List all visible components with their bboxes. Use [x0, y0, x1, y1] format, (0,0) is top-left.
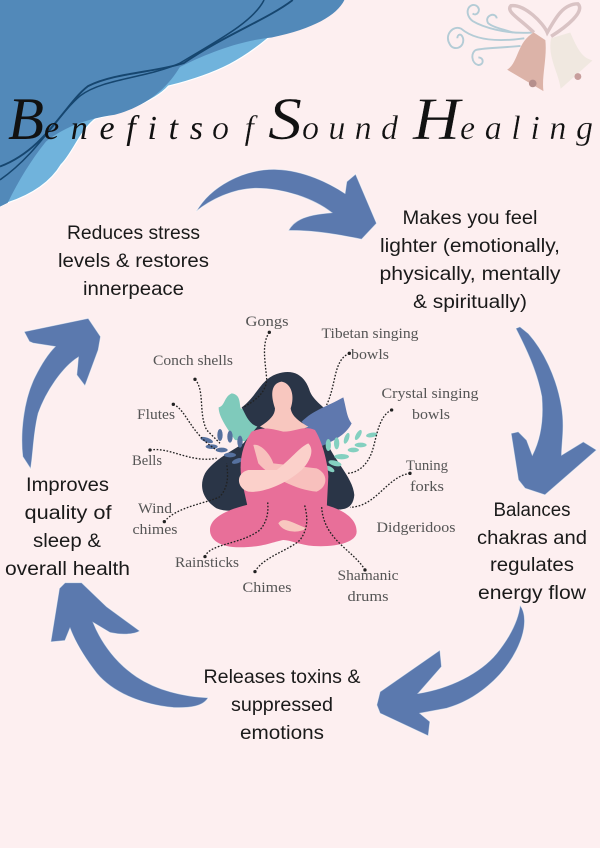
instrument labels: bowls — [351, 347, 389, 363]
arrow: top — [196, 169, 377, 239]
hair — [202, 372, 354, 511]
instrument labels: Crystal singing — [382, 386, 478, 402]
title: enefits — [44, 110, 203, 147]
instrument labels: bowls — [412, 407, 450, 423]
benefit text: chakras: energy flow — [478, 583, 586, 604]
folded foot — [278, 520, 307, 532]
benefit text: lighter — [380, 208, 561, 313]
benefit text: sleep — [5, 475, 130, 580]
instrument labels: forks — [410, 479, 444, 495]
title: B — [8, 86, 44, 152]
benefit text: lighter: physically, mentally — [380, 264, 561, 285]
arrow: left — [22, 318, 101, 469]
title: H — [412, 86, 464, 152]
benefit text: sleep: Improves — [26, 475, 109, 496]
arrow: bottom right — [377, 605, 525, 736]
benefit text: toxins: Releases toxins & — [204, 667, 361, 688]
instrument labels: chimes — [132, 522, 178, 538]
small leaves right — [317, 429, 378, 474]
benefit text: toxins: emotions — [240, 723, 324, 744]
benefit text: reduces stress: innerpeace — [83, 279, 184, 300]
benefit text: chakras: regulates — [490, 555, 574, 576]
title: ealing — [460, 110, 593, 147]
instrument labels: Bells — [132, 453, 162, 469]
benefit text: lighter: & spiritually) — [413, 292, 527, 313]
instrument labels: Tuning — [406, 458, 448, 474]
benefit text: chakras: Balances — [494, 500, 570, 521]
benefit text: chakras: chakras and — [477, 528, 587, 549]
benefit text: reduces stress: Reduces stress — [67, 223, 200, 244]
title: ound — [302, 110, 399, 147]
benefit text: chakras — [477, 500, 587, 604]
instrument labels: Wind — [138, 501, 173, 517]
crossed arms — [253, 445, 325, 492]
instrument labels: Chimes — [242, 580, 292, 596]
benefit text: toxins: suppressed — [231, 695, 333, 716]
benefit text: reduces stress: levels & restores — [58, 251, 209, 272]
benefit text: sleep: quality of — [24, 503, 112, 524]
instrument labels: Gongs — [246, 314, 289, 330]
benefit text: toxins — [204, 667, 361, 744]
small leaves left — [200, 429, 254, 470]
blue leaf — [302, 397, 352, 447]
title: S — [268, 86, 302, 152]
instrument labels: Shamanic — [338, 568, 398, 584]
teal leaf — [219, 393, 257, 442]
decorative blue blob top left — [0, 0, 344, 207]
instrument labels: Flutes — [137, 407, 175, 423]
instrument labels: Didgeridoos — [376, 520, 456, 536]
torso — [241, 428, 328, 510]
arrow: bottom left — [51, 583, 208, 708]
benefit text: sleep: sleep & — [33, 531, 101, 552]
benefit text: lighter: Makes you feel — [402, 208, 538, 229]
title: of — [212, 110, 259, 147]
benefit text: lighter: lighter (emotionally, — [380, 236, 560, 257]
icon: wind and bells — [448, 4, 592, 91]
central illustration: meditating woman — [148, 331, 412, 573]
legs — [210, 503, 357, 547]
instrument labels: Tibetan singing — [322, 326, 418, 342]
benefit text: reduces stress — [58, 223, 209, 300]
instrument labels: Rainsticks — [175, 555, 239, 571]
arrow: right — [511, 327, 597, 495]
benefit text: sleep: overall health — [5, 559, 130, 580]
instrument labels: Conch shells — [153, 353, 233, 369]
face and neck — [260, 382, 308, 437]
title — [8, 86, 593, 152]
instrument labels: drums — [348, 589, 389, 605]
dotted leaders — [150, 332, 410, 572]
instrument labels — [132, 314, 478, 605]
